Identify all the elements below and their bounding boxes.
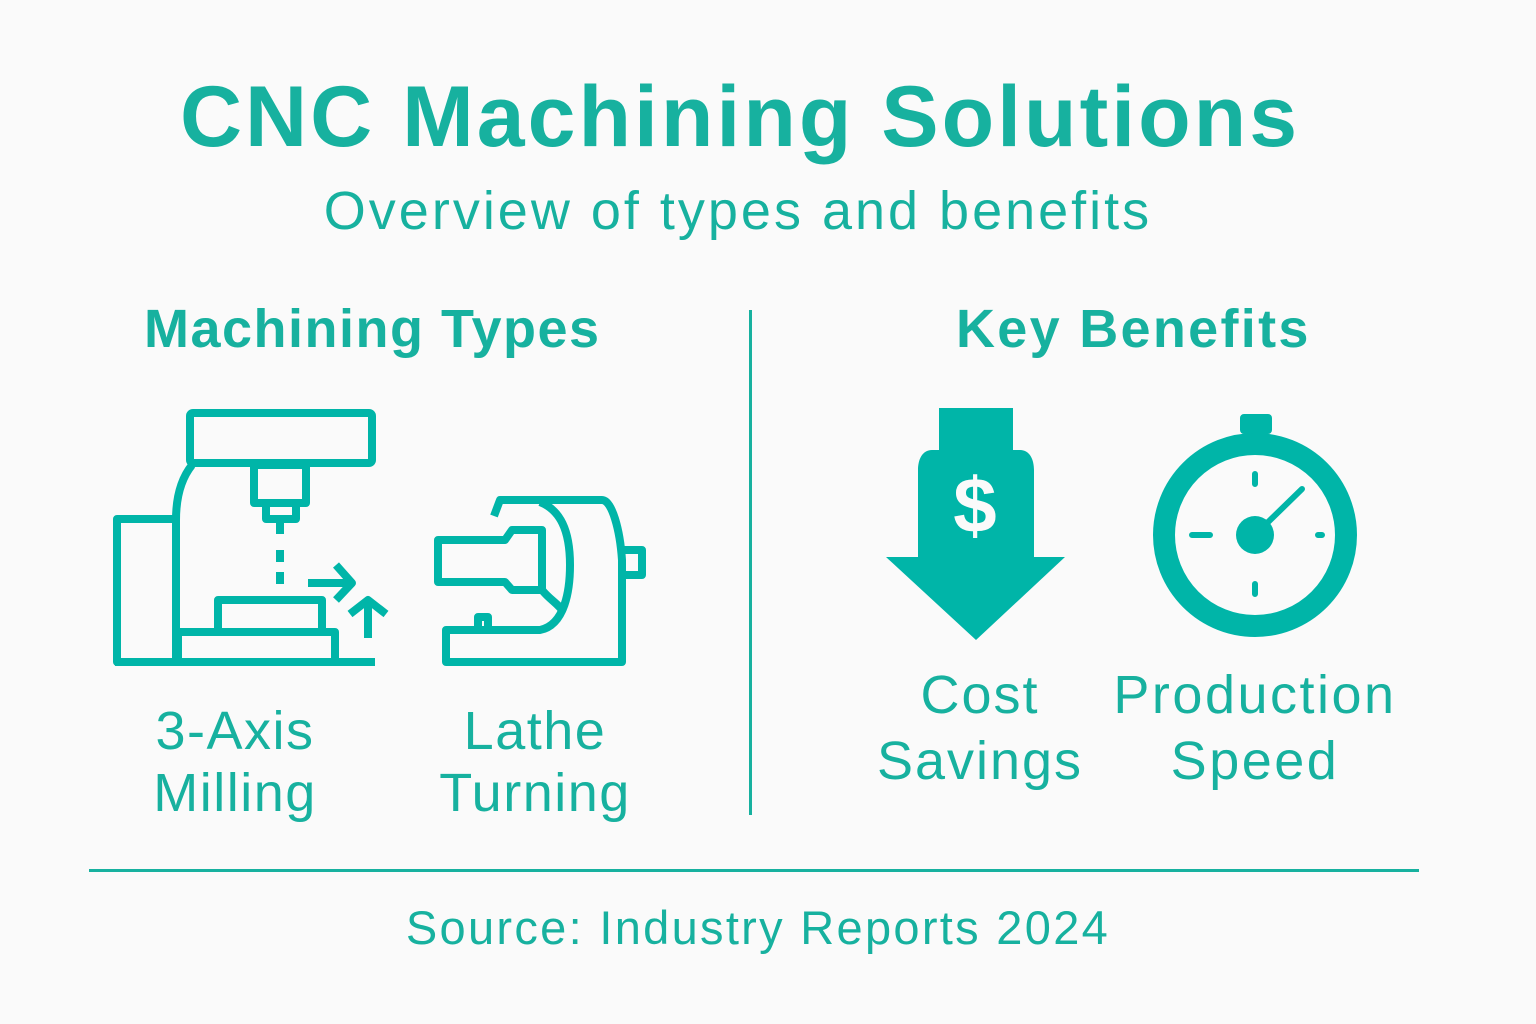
label: lathe turning <box>439 701 631 823</box>
label: cost savings: Cost <box>920 665 1040 725</box>
divider horizontal <box>89 869 1419 872</box>
icon: stopwatch <box>1164 414 1346 626</box>
icon: cost savings arrow <box>886 408 1065 640</box>
label: lathe turning: Lathe <box>464 701 606 761</box>
title: CNC Machining Solutions <box>180 69 1300 165</box>
label: lathe turning: Turning <box>439 763 631 823</box>
label: 3-axis milling: 3-Axis <box>155 701 315 761</box>
label: 3-axis milling: Milling <box>153 763 317 823</box>
label: 3-axis milling <box>153 701 317 823</box>
icon: lathe <box>438 500 642 662</box>
label: cost savings: Savings <box>877 731 1083 791</box>
label: production speed: Speed <box>1171 731 1339 791</box>
label: production speed <box>1113 665 1397 791</box>
label: cost savings <box>877 665 1083 791</box>
label: production speed: Production <box>1113 665 1397 725</box>
icon: cost savings arrow: $ <box>953 461 997 549</box>
subtitle: Overview of types and benefits <box>324 181 1152 241</box>
heading: machining types: Machining Types <box>144 299 601 359</box>
footer source: Source: Industry Reports 2024 <box>406 901 1110 954</box>
heading: key benefits: Key Benefits <box>956 299 1311 359</box>
icon: 3-axis milling machine <box>115 413 386 662</box>
divider vertical <box>749 310 752 815</box>
